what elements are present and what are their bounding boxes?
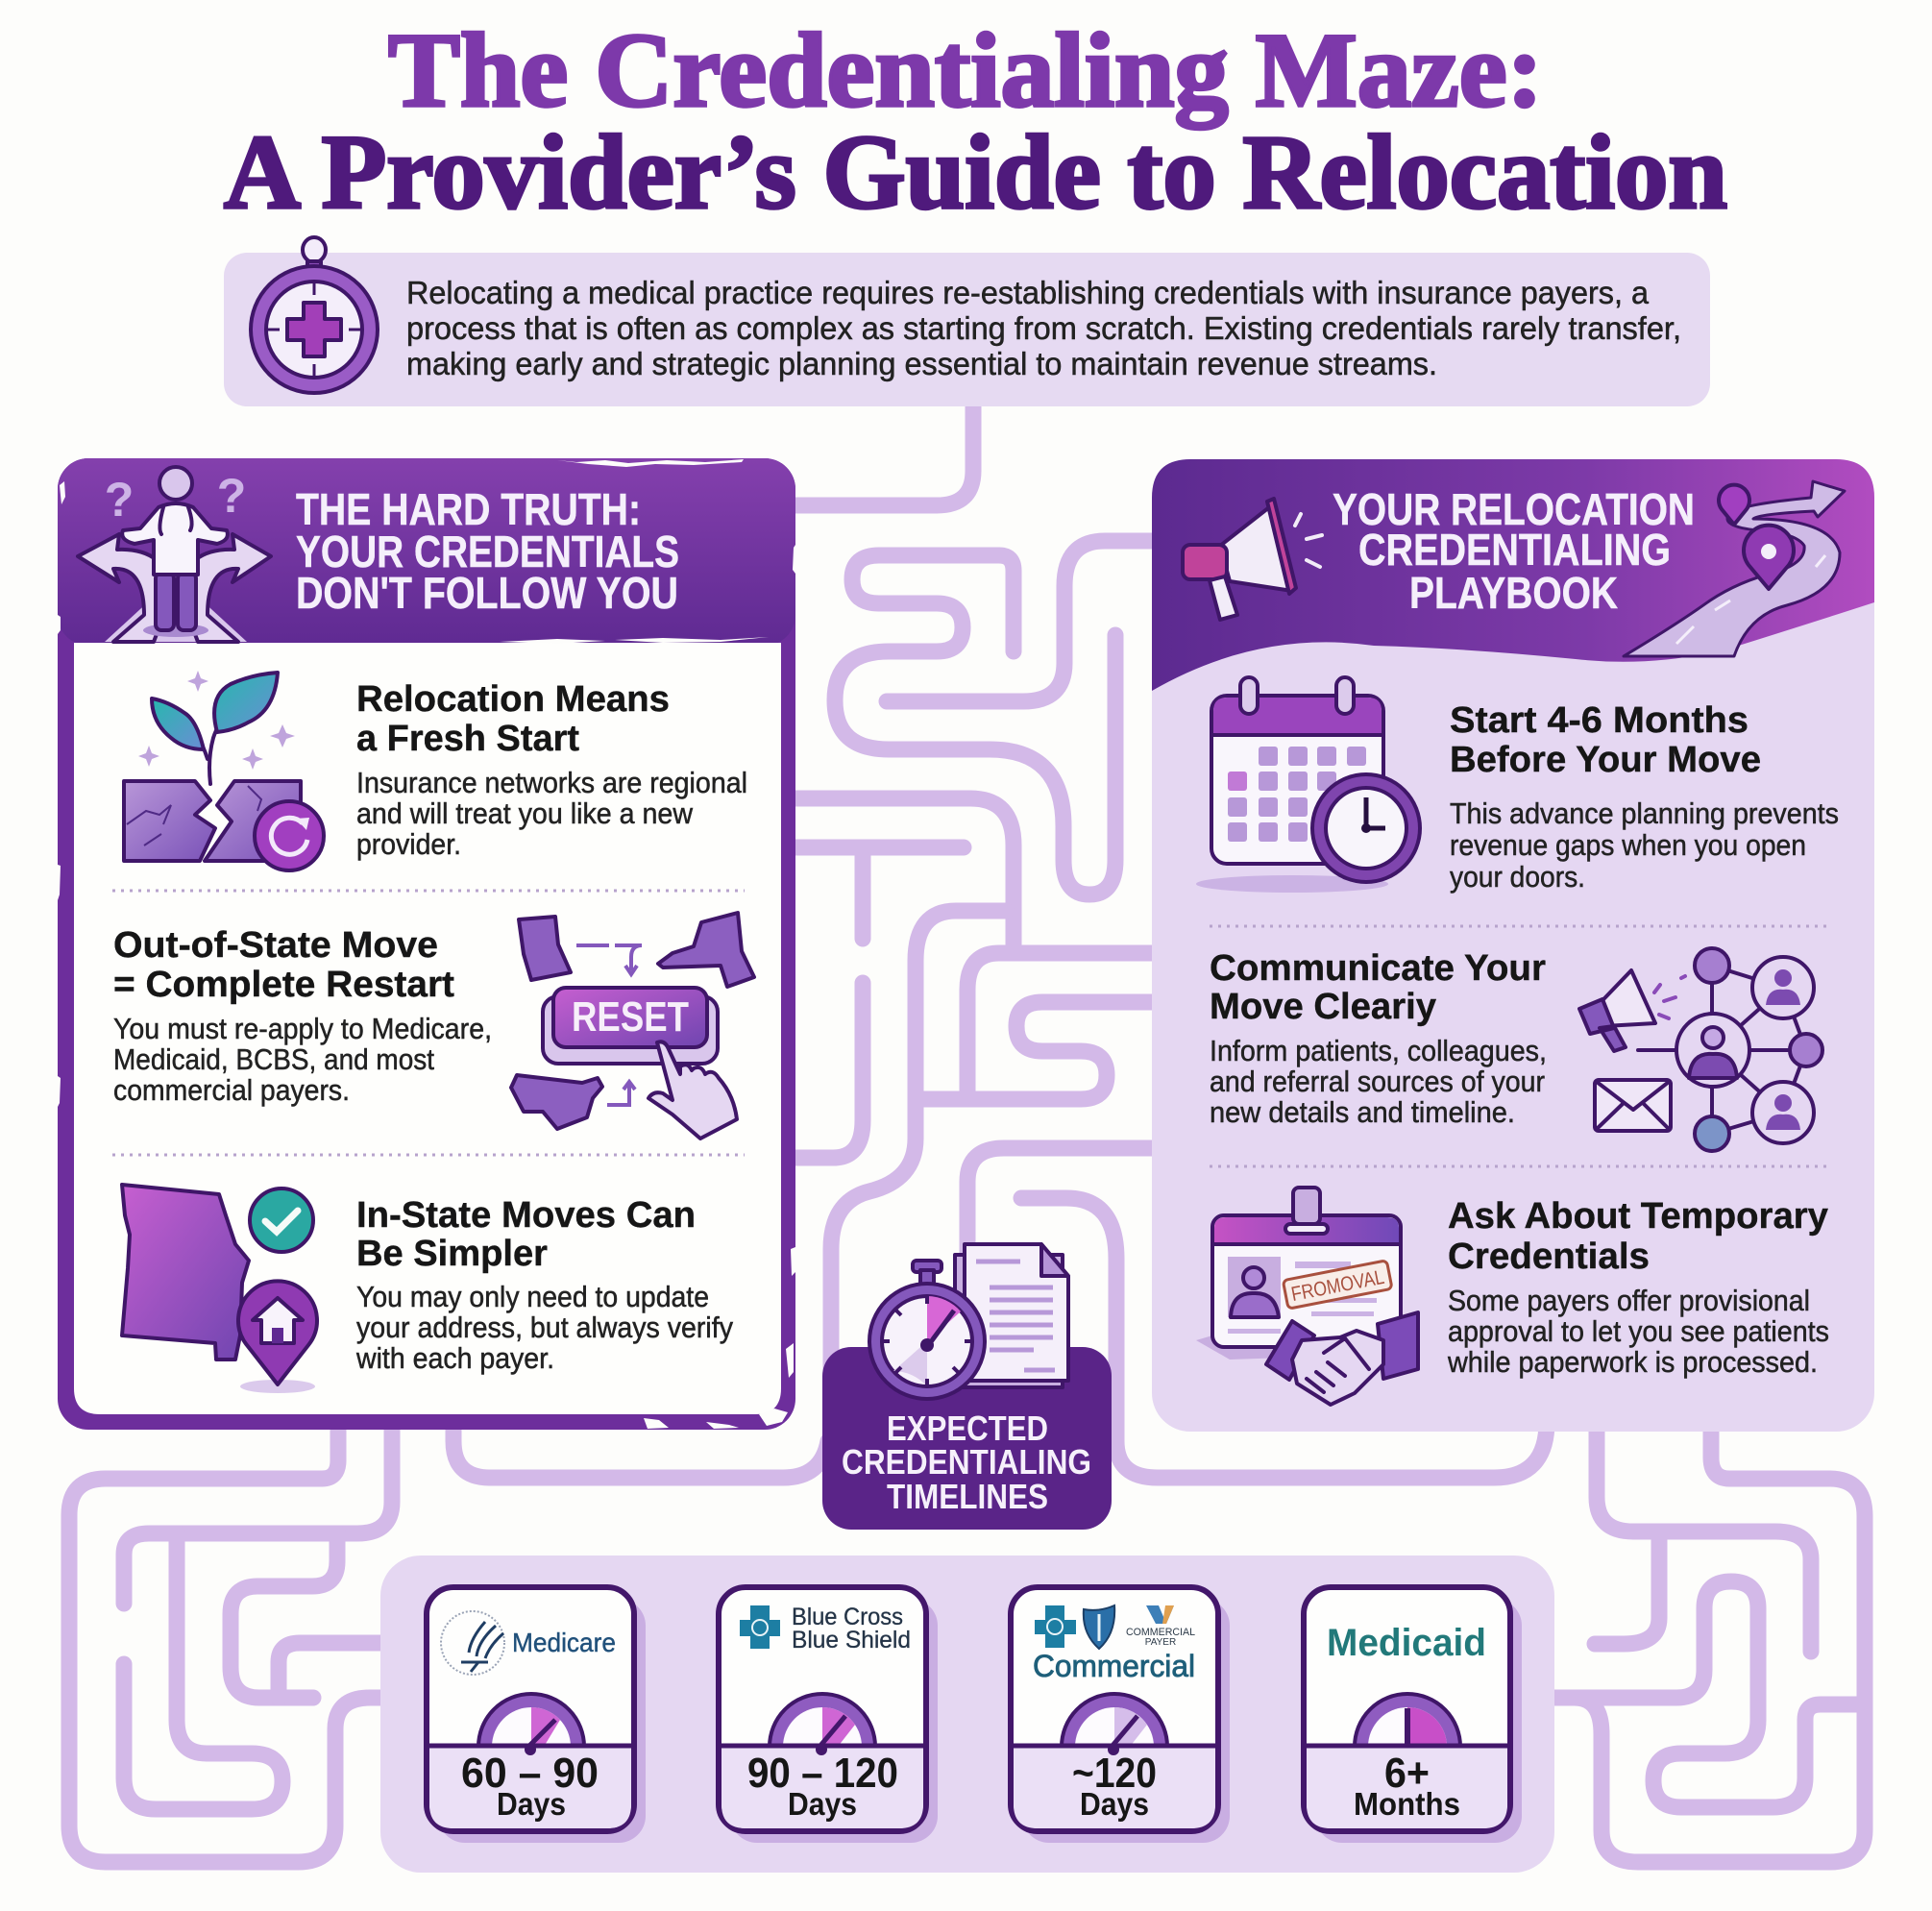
- item: in-state moves: Be Simpler: [356, 1234, 548, 1274]
- card: medicare: 60 – 90: [461, 1750, 599, 1797]
- badge label: [842, 1409, 1091, 1516]
- item: temporary credentials: while paperwork is processed.: [1447, 1345, 1818, 1379]
- gauge: [1062, 1694, 1167, 1747]
- item: temporary credentials: Ask About Temporary: [1448, 1196, 1828, 1237]
- item: relocation means a fresh start: Relocation Means: [356, 679, 670, 720]
- icon: sprout and cracked map: [124, 671, 324, 870]
- icon: doctor at a crossroads: [78, 467, 271, 642]
- icon: reset button with state maps: RESET: [572, 993, 689, 1041]
- card: commercial: ~120: [1072, 1750, 1157, 1797]
- logo: commercial payers: PAYER: [1145, 1637, 1176, 1648]
- icon: document: [955, 1244, 1068, 1387]
- icon: communication network: [1579, 948, 1822, 1151]
- item: start 4-6 months: revenue gaps when you open: [1450, 828, 1806, 862]
- heading: playbook: [1333, 484, 1695, 618]
- logo: medicaid: Medicaid: [1327, 1622, 1486, 1664]
- logo: commercial payers: COMMERCIAL: [1126, 1627, 1195, 1638]
- logo: commercial payers: Commercial: [1033, 1649, 1195, 1683]
- item: communicate your move: and referral sources of your: [1210, 1065, 1545, 1098]
- item: communicate your move: [1210, 948, 1547, 1129]
- heading: the hard truth: THE HARD TRUTH:: [296, 484, 641, 534]
- item: relocation means a fresh start: Insurance networks are regional: [356, 766, 747, 799]
- item: temporary credentials: approval to let you see patients: [1448, 1314, 1829, 1348]
- item: out-of-state move: You must re-apply to Medicare,: [113, 1012, 492, 1045]
- item: in-state moves: In-State Moves Can: [356, 1195, 696, 1236]
- item: communicate your move: new details and timeline.: [1210, 1095, 1515, 1129]
- badge label: TIMELINES: [887, 1477, 1048, 1516]
- item: start 4-6 months: Before Your Move: [1450, 740, 1761, 780]
- icon: winding road with pins: [1624, 481, 1845, 656]
- heading: the hard truth: YOUR CREDENTIALS: [296, 527, 679, 576]
- heading: the hard truth: [296, 484, 679, 618]
- item: temporary credentials: [1447, 1196, 1829, 1379]
- logo: commercial payers: [1033, 1605, 1195, 1683]
- gauge: [478, 1694, 584, 1747]
- card: medicare: [427, 1587, 646, 1843]
- intro text: [406, 275, 1681, 381]
- card: commercial: Days: [1080, 1786, 1149, 1822]
- gauge: [770, 1694, 875, 1747]
- intro text: making early and strategic planning essential to maintain revenue streams.: [406, 346, 1437, 381]
- heading: playbook: PLAYBOOK: [1409, 568, 1618, 618]
- intro text: Relocating a medical practice requires re-establishing credentials with insurance payers, a: [406, 275, 1650, 310]
- card: medicare: Days: [497, 1786, 566, 1822]
- intro panel: [224, 237, 1710, 406]
- logo: medicare: [441, 1611, 616, 1675]
- icon: calendar with clock: [1196, 677, 1420, 893]
- card: blue cross blue shield: [719, 1587, 938, 1843]
- gauge: [1355, 1694, 1460, 1747]
- panel: the hard truth: [58, 458, 795, 1430]
- badge label: EXPECTED: [887, 1409, 1048, 1448]
- card: medicaid: 6+: [1384, 1750, 1430, 1797]
- item: communicate your move: Communicate Your: [1210, 948, 1546, 989]
- heading: playbook: CREDENTIALING: [1358, 525, 1671, 575]
- item: relocation means a fresh start: [356, 679, 747, 861]
- item: start 4-6 months: This advance planning prevents: [1450, 796, 1839, 830]
- panel: relocation playbook: [1152, 459, 1874, 1432]
- header wave: [1152, 459, 1874, 691]
- item: temporary credentials: Credentials: [1448, 1237, 1650, 1277]
- panel body: [74, 643, 781, 1414]
- item: temporary credentials: Some payers offer provisional: [1448, 1284, 1810, 1317]
- item: communicate your move: Move Cleariy: [1210, 987, 1436, 1027]
- icon: doctor at a crossroads: ?: [217, 469, 246, 523]
- item: out-of-state move: = Complete Restart: [113, 965, 454, 1005]
- title: A Provider’s Guide to Relocation: [224, 113, 1727, 231]
- panel: timelines: [380, 1556, 1554, 1873]
- item: out-of-state move: commercial payers.: [113, 1073, 350, 1107]
- card: medicaid: Months: [1354, 1786, 1460, 1822]
- card: blue cross blue shield: 90 – 120: [747, 1750, 898, 1797]
- item: in-state moves: your address, but always verify: [356, 1311, 733, 1344]
- title: The Credentialing Maze:: [388, 12, 1543, 129]
- icon: reset button with state maps: [511, 913, 754, 1139]
- logo: blue cross blue shield: Blue Cross: [792, 1604, 903, 1630]
- item: out-of-state move: Out-of-State Move: [113, 925, 438, 966]
- logo: medicare: Medicare: [512, 1628, 616, 1657]
- icon: stopwatch with medical cross: [251, 237, 378, 393]
- title: [224, 12, 1727, 231]
- icon: stopwatch: [869, 1261, 985, 1399]
- item: start 4-6 months: your doors.: [1450, 860, 1585, 894]
- icon: state with check and home pin: [122, 1185, 317, 1393]
- item: start 4-6 months: [1450, 700, 1839, 894]
- card: medicaid: [1304, 1587, 1522, 1843]
- item: start 4-6 months: Start 4-6 Months: [1450, 700, 1749, 741]
- badge label: CREDENTIALING: [842, 1442, 1091, 1482]
- item: out-of-state move: Medicaid, BCBS, and most: [113, 1042, 434, 1076]
- badge: expected credentialing timelines: [822, 1244, 1112, 1530]
- heading: playbook: YOUR RELOCATION: [1333, 484, 1695, 534]
- logo: blue cross blue shield: Blue Shield: [792, 1627, 911, 1654]
- item: relocation means a fresh start: a Fresh Start: [356, 719, 579, 759]
- logo: blue cross blue shield: [740, 1604, 911, 1654]
- icon: megaphone: [1183, 499, 1322, 620]
- intro text: process that is often as complex as starting from scratch. Existing credentials rarely transfer,: [406, 310, 1681, 346]
- item: relocation means a fresh start: provider.: [356, 827, 461, 861]
- item: communicate your move: Inform patients, colleagues,: [1210, 1034, 1547, 1067]
- item: in-state moves: [355, 1195, 733, 1375]
- icon: doctor at a crossroads: ?: [105, 473, 134, 527]
- icon: temporary ID and handshake: [1196, 1188, 1418, 1405]
- card: blue cross blue shield: Days: [788, 1786, 857, 1822]
- item: out-of-state move: [113, 925, 492, 1107]
- distressed edge specks: [58, 459, 795, 1429]
- heading: the hard truth: DON'T FOLLOW YOU: [296, 568, 678, 618]
- card: commercial: [1011, 1587, 1230, 1843]
- maze paths: [69, 399, 1865, 1862]
- item: relocation means a fresh start: and will treat you like a new: [356, 796, 694, 830]
- item: in-state moves: with each payer.: [355, 1341, 554, 1375]
- stamp: FROMOVAL: [1289, 1266, 1386, 1306]
- item: in-state moves: You may only need to update: [356, 1280, 709, 1313]
